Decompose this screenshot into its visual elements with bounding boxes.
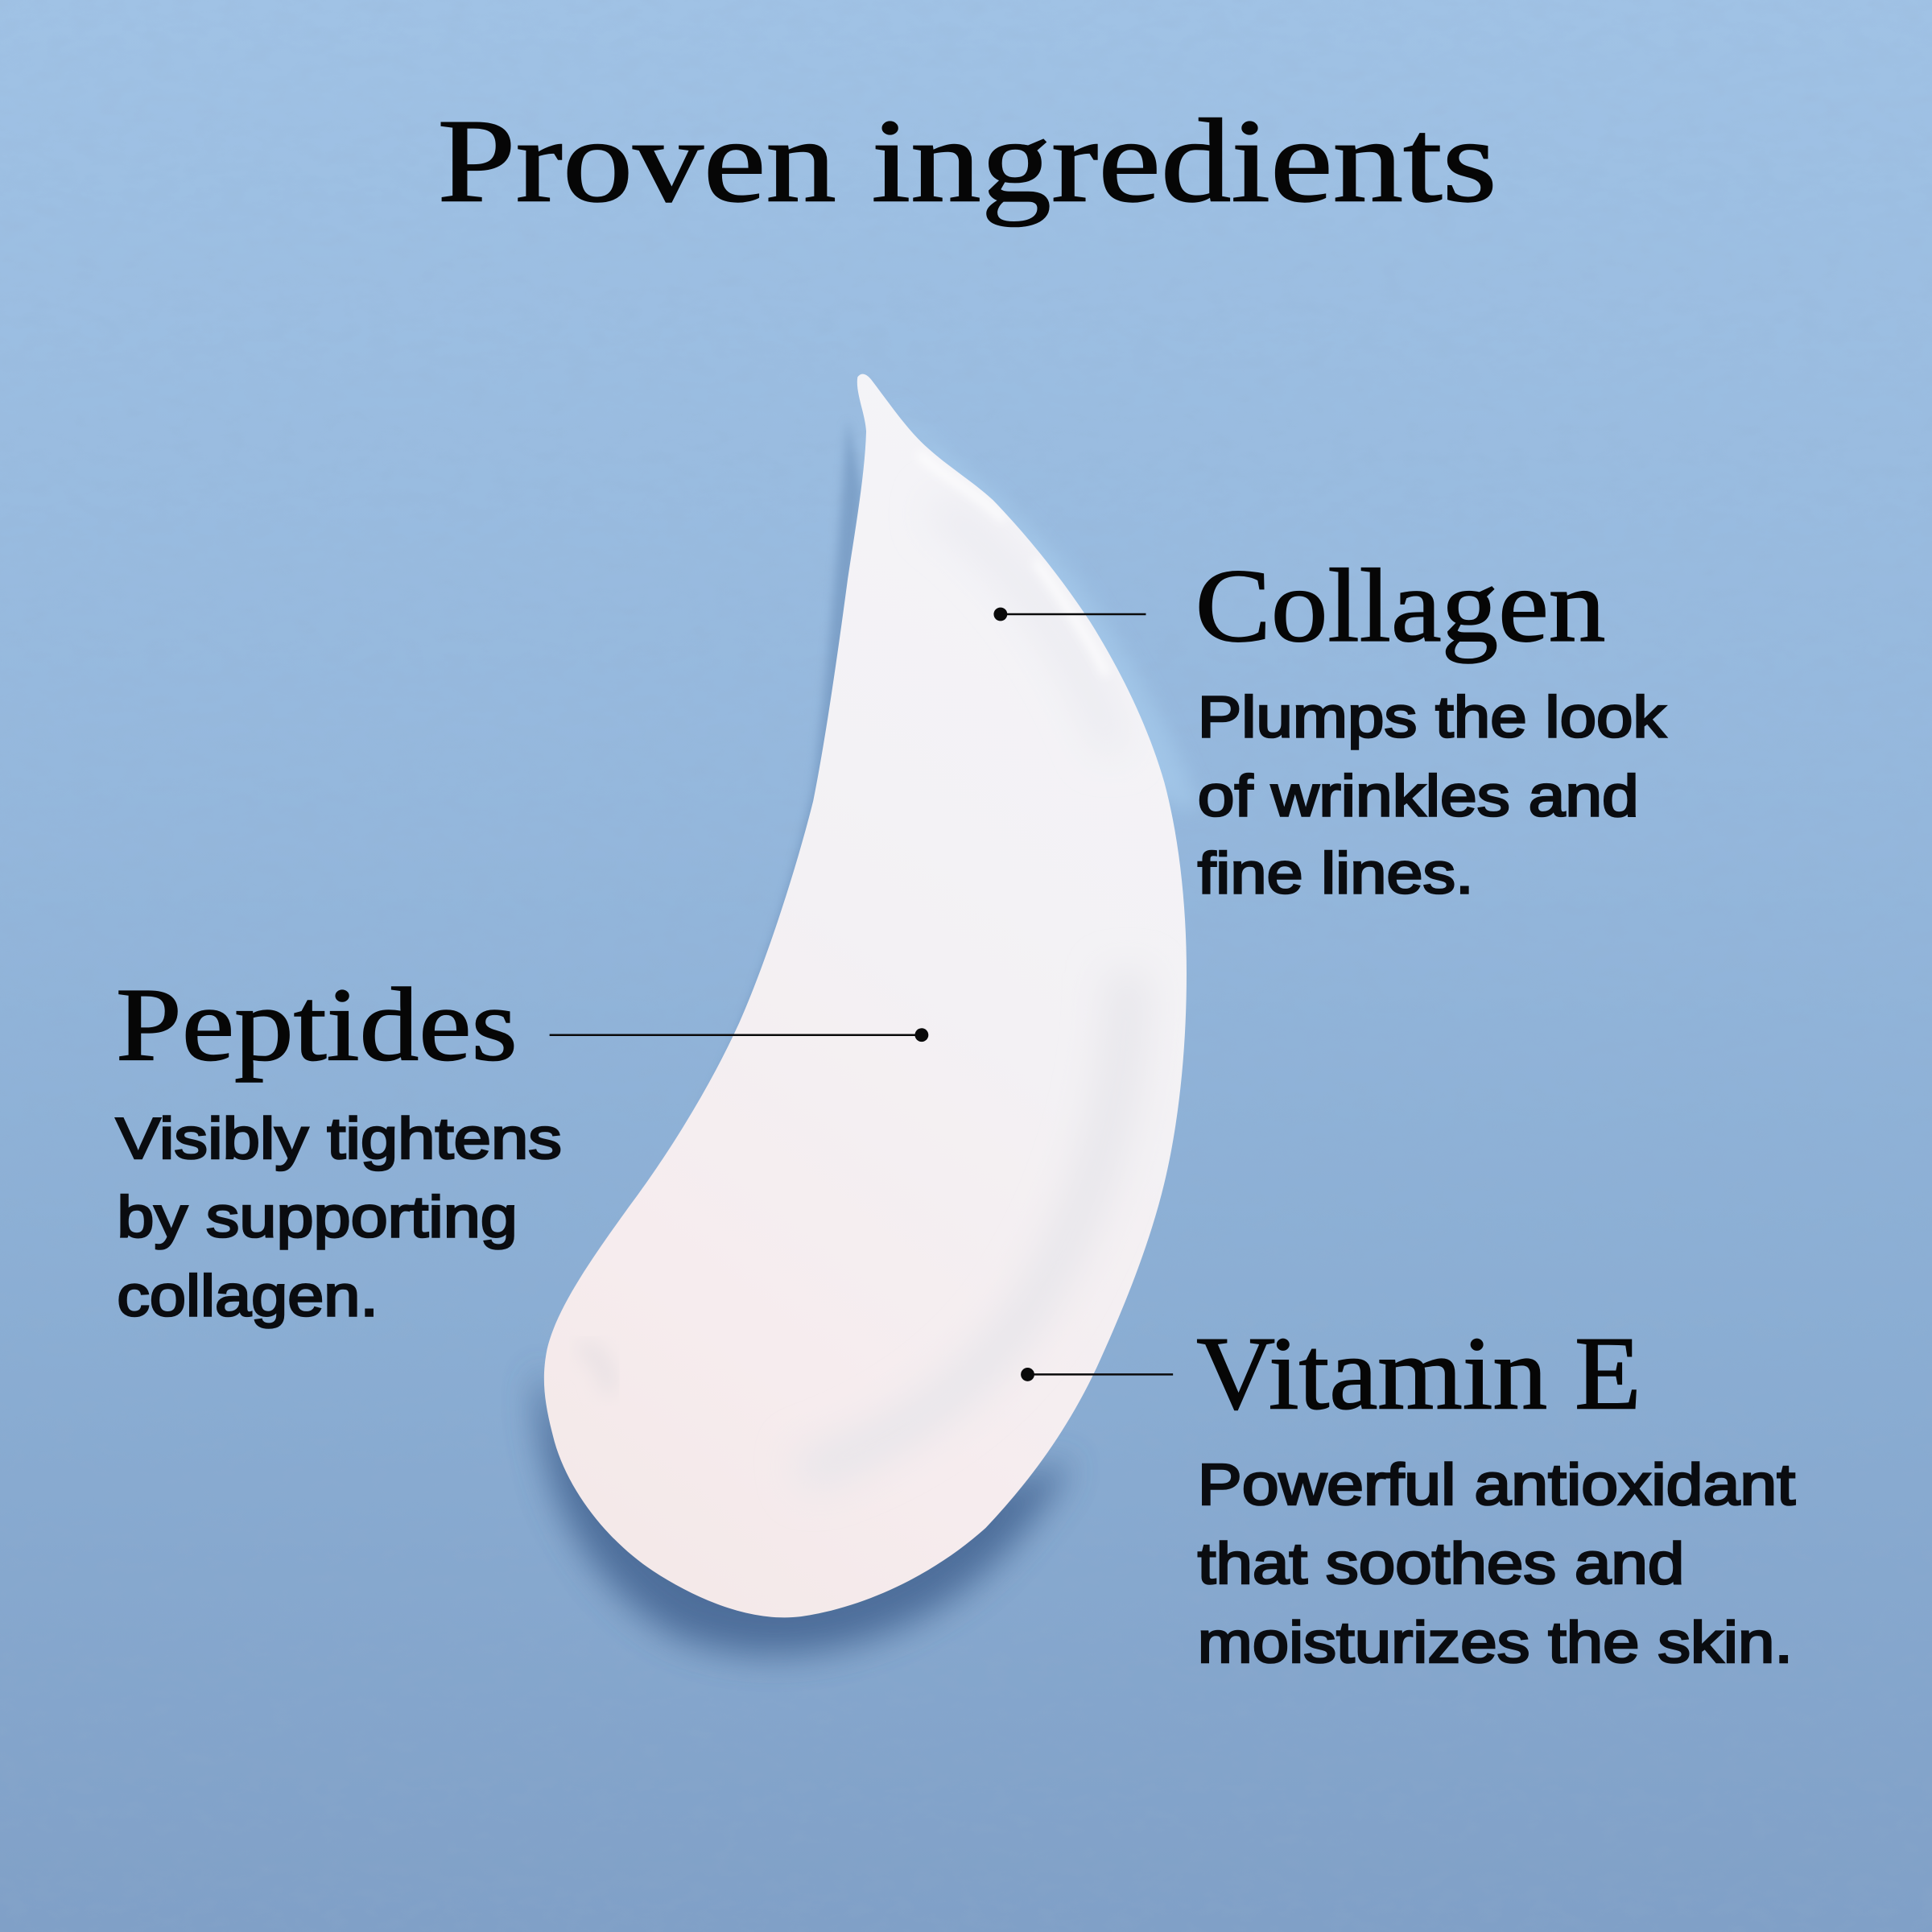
leader line: Vitamin E [1021,1368,1173,1381]
text: Vitamin E description: Powerful antioxidant [1198,1453,1795,1517]
text: Collagen description: Plumps the look [1198,685,1667,749]
callout: Vitamin E [1021,1315,1795,1675]
cream shading [579,453,1128,1472]
cream body [544,374,1187,1617]
heading: Vitamin E: Vitamin E [1196,1315,1641,1431]
text: Collagen description [1198,685,1667,906]
callout: Peptides [116,967,928,1329]
leader line: Peptides [550,1028,928,1042]
leader line: Collagen [993,608,1146,621]
text: Peptides description [116,1107,562,1329]
text: Peptides description: by supporting [117,1186,518,1250]
glow behind the upper cream edge [887,394,1201,813]
cast shadow [539,1368,1072,1654]
text: Vitamin E description: that soothes and [1198,1532,1684,1596]
callout: Collagen [993,548,1667,906]
text: Peptides description: Visibly tightens [116,1107,562,1171]
text: Peptides description: collagen. [117,1265,378,1329]
heading: Peptides: Peptides [116,967,518,1083]
text: Vitamin E description [1198,1453,1795,1675]
heading: Collagen: Collagen [1195,548,1605,664]
text: Collagen description: fine lines. [1198,842,1474,906]
cream swatch [539,374,1201,1654]
text: Collagen description: of wrinkles and [1198,764,1639,828]
text: Vitamin E description: moisturizes the skin. [1198,1611,1793,1675]
title: Proven ingredients [437,95,1497,227]
